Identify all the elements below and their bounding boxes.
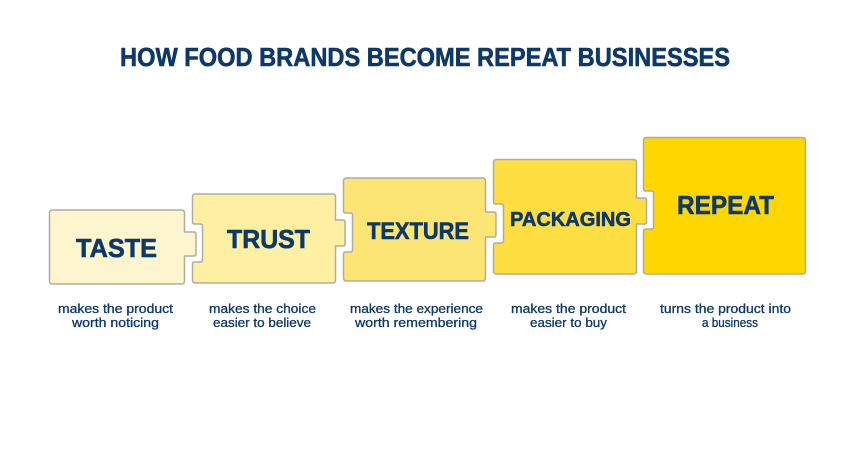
caption: taste: makes the product (58, 301, 173, 316)
label: packaging: PACKAGING (510, 208, 631, 231)
panel: texture step (344, 178, 496, 281)
puzzle piece: trust (192, 194, 345, 283)
caption: taste (58, 301, 173, 330)
panel: trust step (192, 194, 345, 283)
caption: packaging: easier to buy (530, 315, 608, 330)
caption: texture (350, 301, 483, 330)
caption: repeat: a business (702, 315, 758, 330)
panel: repeat step (644, 138, 806, 274)
puzzle piece: repeat (644, 138, 806, 274)
puzzle piece: texture (344, 178, 496, 281)
caption: texture: worth remembering (354, 315, 477, 330)
label: trust: TRUST (227, 224, 310, 254)
panel: taste step (50, 210, 196, 284)
puzzle piece: taste (50, 210, 196, 284)
caption: repeat (660, 301, 791, 330)
title: HOW FOOD BRANDS BECOME REPEAT BUSINESSES (120, 42, 730, 72)
caption: taste: worth noticing (71, 315, 159, 330)
caption: packaging: makes the product (511, 301, 626, 316)
caption: trust: easier to believe (213, 315, 311, 330)
caption: repeat: turns the product into (660, 301, 791, 316)
puzzle piece: packaging (494, 160, 646, 274)
caption: trust: makes the choice (209, 301, 316, 316)
caption: trust (209, 301, 316, 330)
label: taste: TASTE (76, 233, 157, 263)
label: texture: TEXTURE (367, 218, 469, 245)
panel: packaging step (494, 160, 646, 274)
caption: texture: makes the experience (350, 301, 483, 316)
caption: packaging (511, 301, 626, 330)
label: repeat: REPEAT (677, 190, 774, 220)
